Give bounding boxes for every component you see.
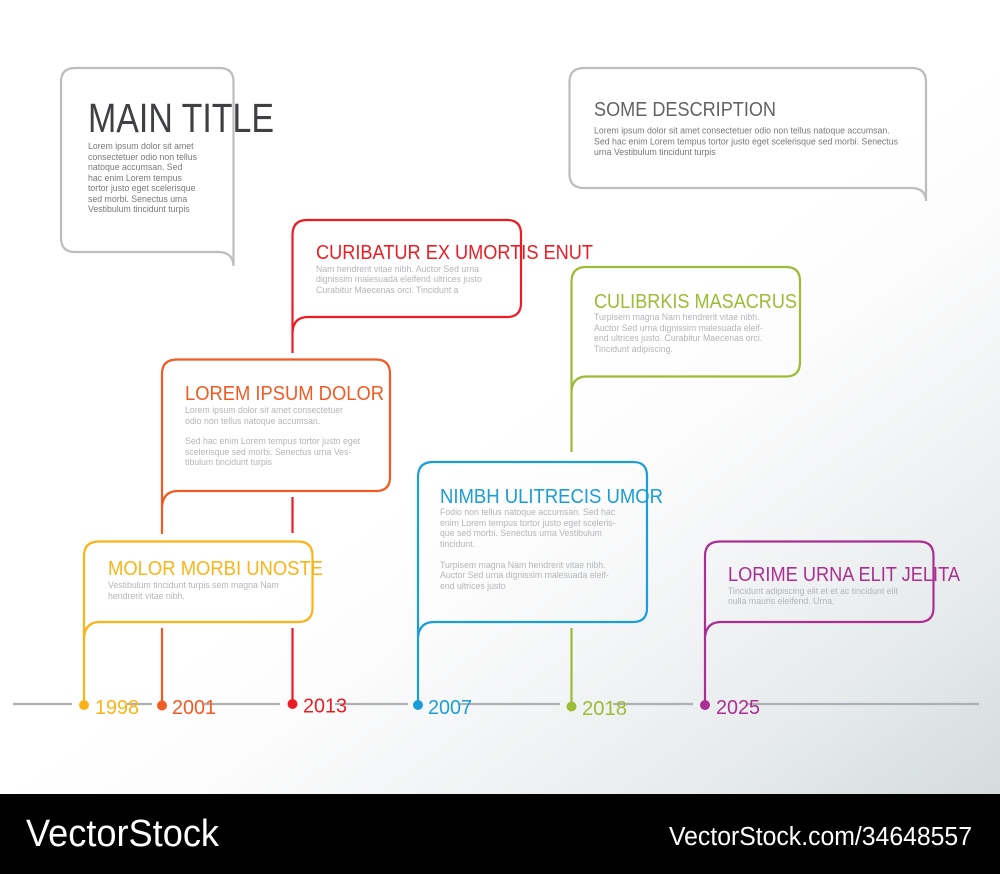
- marker: 2007: 2007: [428, 697, 472, 719]
- text: 1998 event body: Vestibulum tincidunt turpis sem magna Nam: [108, 580, 279, 590]
- text: 2013 event body: [316, 264, 482, 295]
- marker: 2001: 2001: [172, 697, 216, 719]
- watermark bar: [0, 794, 1000, 874]
- text: 2001 event body: scelerisque sed morbi. Senectus urna Ves-: [185, 447, 351, 457]
- panel: 2007 event: [418, 462, 663, 705]
- heading: 2018 event: CULIBRKIS MASACRUS: [594, 291, 797, 313]
- text: 2001 event body: Lorem ipsum dolor sit amet consectetuer: [185, 405, 343, 415]
- text: 1998 event body: hendrerit vitae nibh.: [108, 591, 185, 601]
- text: 2001 event body: odio non tellus natoque accumsan.: [185, 416, 320, 426]
- text: 2013 event body: dignissim malesuada eleifend ultrices justo: [316, 274, 482, 284]
- text: main title body: consectetuer odio non tellus: [88, 152, 198, 162]
- text: main title body: Vestibulum tincidunt turpis: [88, 204, 190, 214]
- text: main title body: tortor justo eget scelerisque: [88, 183, 196, 193]
- marker: 2001: [157, 628, 216, 719]
- heading: 2025 event: LORIME URNA ELIT JELITA: [728, 564, 961, 586]
- marker: 2018: 2018: [582, 698, 627, 720]
- text: main title body: hac enim Lorem tempus: [88, 173, 182, 183]
- heading: description: SOME DESCRIPTION: [594, 99, 776, 121]
- panel: 1998 event: [84, 542, 323, 705]
- text: 2018 event body: end ultrices justo. Curabitur Maecenas orci.: [594, 333, 762, 343]
- text: main title body: natoque accumsan. Sed: [88, 162, 183, 172]
- text: description body: Lorem ipsum dolor sit amet consectetuer odio non tellus natoque accumsan.: [594, 126, 890, 136]
- text: 2007 event body: Fodio non tellus natoque accumsan. Sed hac: [440, 507, 616, 517]
- panel: main title: [61, 68, 274, 266]
- panel: 2013 event: [292, 220, 593, 353]
- text: 2007 event body: tincidunt.: [440, 539, 475, 549]
- heading: 2007 event: NIMBH ULITRECIS UMOR: [440, 486, 663, 508]
- text: 2013 event body: Nam hendrerit vitae nibh. Auctor Sed urna: [316, 264, 479, 274]
- text: 1998 event body: [108, 580, 279, 601]
- text: main title body: sed morbi. Senectus uma: [88, 194, 187, 204]
- heading: 2013 event: CURIBATUR EX UMORTIS ENUT: [316, 242, 593, 264]
- text: 2018 event body: Turpisem magna Nam hendrerit vitae nibh.: [594, 312, 760, 322]
- text: 2007 event body: que sed morbi. Senectus urna Vestibulum: [440, 528, 602, 538]
- text: 2025 event body: [728, 586, 898, 606]
- text: 2001 event body: tibulum tincidunt turpis: [185, 457, 273, 467]
- text: 2018 event body: [594, 312, 763, 354]
- marker: 2013: [288, 497, 347, 718]
- watermark: logo: VectorStock: [26, 813, 220, 855]
- text: 2018 event body: Tincidunt adipiscing.: [594, 344, 673, 354]
- text: description body: [594, 126, 899, 157]
- text: 2001 event body: Sed hac enim Lorem tempus tortor justo eget: [185, 436, 361, 446]
- text: 2007 event body: end ultrices justo: [440, 581, 506, 591]
- marker: 2025: 2025: [716, 697, 760, 719]
- marker: 1998: 1998: [95, 697, 139, 719]
- text: 2018 event body: Auctor Sed urna dignissim malesuada eleif-: [594, 323, 763, 333]
- text: 2007 event body: Auctor Sed urna dignissim malesuada eleif-: [440, 570, 609, 580]
- text: description body: urna Vestibulum tincidunt turpis: [594, 147, 716, 157]
- heading: 1998 event: MOLOR MORBI UNOSTE: [108, 558, 323, 580]
- text: 2013 event body: Curabitur Maecenas orci. Tincidunt a: [316, 285, 459, 295]
- panel: description: [570, 68, 926, 201]
- text: 2007 event body: [440, 507, 616, 591]
- heading: 2001 event: LOREM IPSUM DOLOR: [185, 383, 384, 405]
- panel: 2001 event: [162, 360, 390, 534]
- text: main title body: [88, 141, 198, 214]
- heading: main title: MAIN TITLE: [88, 95, 274, 141]
- text: 2007 event body: enim Lorem tempus tortor justo eget sceleris-: [440, 518, 616, 528]
- text: 2001 event body: [185, 405, 361, 467]
- text: 2025 event body: Tincidunt adipiscing elit et et ac tincidunt elit: [728, 586, 898, 596]
- text: description body: Sed hac enim Lorem tempus tortor justo eget scelerisque sed morbi. Senectus: [594, 136, 899, 146]
- text: main title body: Lorem ipsum dolor sit amet: [88, 141, 194, 151]
- timeline axis: [13, 703, 979, 705]
- panel: 2025 event: [705, 542, 961, 705]
- text: 2025 event body: nulla mauris eleifend. Urna.: [728, 596, 835, 606]
- watermark: url: VectorStock.com/34648557: [669, 823, 972, 851]
- text: 2007 event body: Turpisem magna Nam hendrerit vitae nibh.: [440, 560, 606, 570]
- marker: 2013: 2013: [303, 696, 347, 718]
- panel: 2018 event: [572, 267, 800, 452]
- marker: 2018: [566, 628, 627, 720]
